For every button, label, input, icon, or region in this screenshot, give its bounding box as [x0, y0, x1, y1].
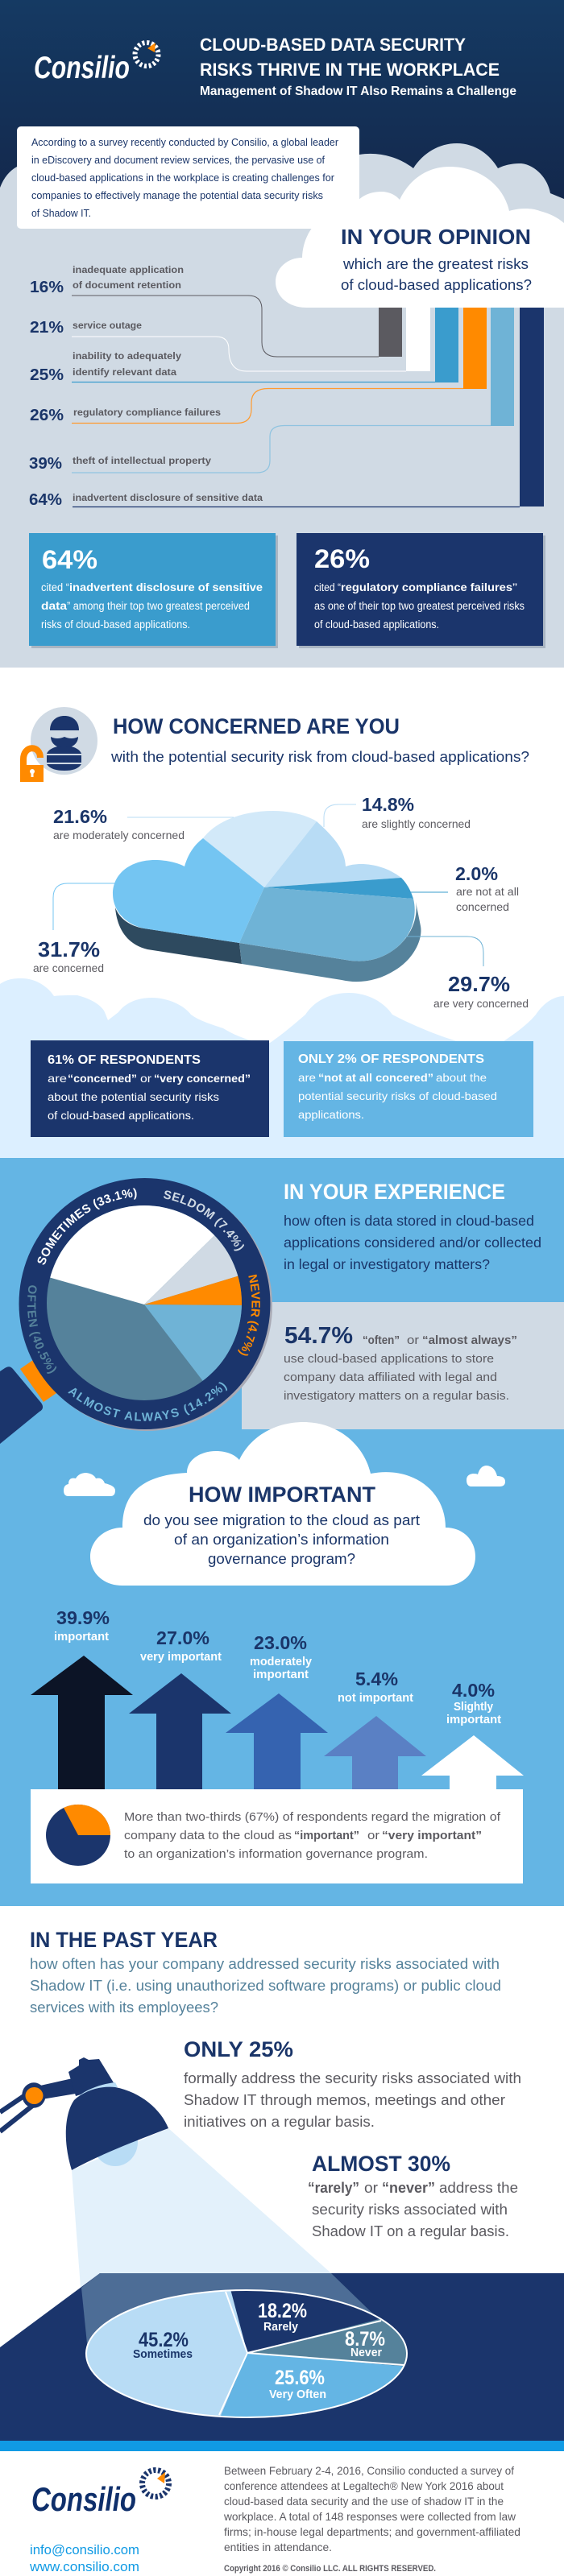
heading: in the past year: IN THE PAST YEAR [30, 1928, 218, 1952]
callout: more than two-thirds: company data to the cloud as [124, 1829, 292, 1842]
bar: relevant data 25% [435, 298, 458, 382]
panel: 54.7% grey band [242, 1302, 564, 1429]
risk row: 21%: service outage [73, 320, 142, 331]
intro text box: According to a survey recently conducted by Consilio, a global leader [31, 136, 339, 148]
white cloud: how important: do you see migration to the cloud as part [143, 1512, 420, 1528]
arrow: 23.0% moderately important: moderately [250, 1655, 313, 1668]
callout: 61% of respondents: 61% OF RESPONDENTS [48, 1053, 201, 1067]
callout: 61% of respondents [31, 1040, 269, 1137]
callout: only 2% of respondents: about the [436, 1071, 487, 1084]
arrow: 23.0% moderately important: important [253, 1668, 309, 1681]
label: 31.7% concerned [33, 883, 115, 974]
callout: 26% regulatory compliance: ” [512, 581, 517, 593]
icon: thief with open lock [20, 707, 97, 782]
label: 8.7% never: Never [350, 2346, 382, 2359]
magnifying glass pie chart: OFTEN (40.5%) [27, 1285, 56, 1374]
callout: more than two-thirds [31, 1789, 523, 1883]
callout: 64% inadvertent disclosure: inadvertent disclosure of sensitive [69, 581, 263, 593]
contact details [29, 2542, 139, 2574]
bar: intellectual property 39% [491, 298, 514, 426]
white cloud: how important [90, 1422, 475, 1586]
panel: 54.7% grey band: “often” [363, 1334, 400, 1347]
callout: 26% regulatory compliance: 26% [314, 544, 370, 573]
intro text box: companies to effectively manage the potential data security risks [31, 189, 323, 201]
text: almost 30%: “never” [382, 2180, 435, 2196]
text: almost 30%: or [364, 2180, 378, 2196]
risk row: 26%: 26% [30, 407, 64, 424]
contact details: info@consilio.com [30, 2542, 139, 2557]
magnifying glass pie chart: ALMOST ALWAYS (14.2%) [68, 1382, 227, 1421]
label: 25.6% very often: Very Often [269, 2388, 326, 2401]
label: 29.7% very concerned: are very concerned [433, 997, 529, 1010]
risk row: 64% [29, 491, 520, 509]
callout: 26% regulatory compliance: as one of their top two greatest perceived risks [314, 600, 525, 612]
bar: regulatory compliance 26% [463, 298, 487, 389]
callout: only 2% of respondents: ONLY 2% OF RESPONDENTS [298, 1052, 484, 1066]
callout: 64% inadvertent disclosure: risks of cloud-based applications. [41, 618, 190, 631]
survey methodology text: Between February 2-4, 2016, Consilio conducted a survey of [224, 2464, 514, 2477]
callout: 64% inadvertent disclosure: 64% [42, 545, 97, 574]
callout: 61% of respondents: about the potential security risks [48, 1090, 219, 1103]
heading: in your experience: how often is data stored in cloud-based [284, 1213, 534, 1229]
magnifying glass pie chart: NEVER (4.7%) [238, 1274, 260, 1356]
arrow: 4.0% slightly important: 4.0% [452, 1680, 495, 1701]
arrow: 5.4% not important: 5.4% [355, 1668, 398, 1689]
arrow: 39.9% important: important [54, 1630, 109, 1644]
white cloud: in your opinion: which are the greatest risks [342, 256, 529, 272]
title: Management of Shadow IT Also Remains a Challenge [200, 85, 516, 98]
panel: 54.7% grey band: use cloud-based applications to store [284, 1352, 494, 1366]
arrow: 23.0% moderately important: 23.0% [254, 1632, 307, 1653]
label: 21.6% moderately concerned: 21.6% [53, 806, 107, 827]
callout: more than two-thirds: “very important” [382, 1829, 482, 1842]
text: almost 30%: address the [439, 2180, 518, 2196]
magnifying glass pie chart [19, 1178, 272, 1431]
risk row: 25% [30, 350, 435, 384]
risk row: 64%: 64% [29, 491, 62, 509]
risk row: 16%: inadequate application [73, 264, 184, 275]
arrow: 39.9% important: 39.9% [56, 1607, 110, 1628]
callout: more than two-thirds: “important” [294, 1829, 359, 1842]
text: almost 30%: ALMOST 30% [312, 2152, 450, 2176]
title [200, 35, 516, 98]
footer logo: Consilio [31, 2480, 136, 2518]
risk row: 39% [29, 425, 491, 473]
label: 2.0% not at all concerned [410, 863, 519, 913]
heading: in the past year: services with its employees? [30, 1999, 218, 2016]
intro text box: in eDiscovery and document review services, the pervasive use of [31, 154, 325, 166]
label: 21.6% moderately concerned [53, 806, 234, 841]
text: almost 30%: Shadow IT on a regular basis. [312, 2223, 509, 2239]
callout: more than two-thirds: to an organization’s information governance program. [124, 1847, 428, 1861]
label: 45.2% sometimes: 45.2% [139, 2329, 189, 2351]
icon: small cloud right [467, 1466, 505, 1486]
callout: only 2% of respondents: potential security risks of cloud-based [298, 1090, 497, 1102]
heading: in your experience: in legal or investigatory matters? [284, 1256, 490, 1272]
risk row: 25%: identify relevant data [73, 366, 176, 378]
callout: 64% inadvertent disclosure [29, 533, 278, 648]
callout: 61% of respondents: “very concerned” [154, 1072, 251, 1085]
heading: in the past year [30, 1928, 501, 2016]
elliptical pie chart [85, 2289, 408, 2418]
white cloud: in your opinion: IN YOUR OPINION [341, 225, 531, 249]
callout: only 2% of respondents: “not at all concered” [318, 1071, 433, 1084]
label: 29.7% very concerned [403, 937, 529, 1010]
intro text box [17, 126, 359, 229]
label: 18.2% rarely [258, 2300, 307, 2334]
risk row: 25%: 25% [30, 366, 64, 384]
survey methodology text: workplace. A total of 148 responses were collected from law [223, 2510, 516, 2523]
label: 31.7% concerned: 31.7% [38, 937, 100, 961]
header logo: Consilio [34, 51, 130, 85]
heading: how concerned are you: HOW CONCERNED ARE YOU [113, 714, 400, 738]
survey methodology text [223, 2464, 520, 2553]
panel: 54.7% grey band: investigatory matters on a regular basis. [284, 1389, 509, 1403]
callout: 26% regulatory compliance [297, 533, 545, 648]
risk row: 26%: regulatory compliance failures [73, 407, 221, 418]
bar: service outage 21% [406, 298, 430, 371]
icon: desk lamp [0, 2057, 168, 2170]
label: 8.7% never [345, 2328, 385, 2359]
panel: risks background cloud [0, 143, 564, 668]
white cloud: in your opinion [276, 167, 564, 308]
callout: 61% of respondents: of cloud-based applications. [48, 1109, 194, 1122]
white cloud: how important: of an organization’s information [174, 1532, 389, 1548]
light beam [72, 2128, 331, 2288]
risk row: 64%: inadvertent disclosure of sensitive data [73, 492, 263, 503]
header background [0, 0, 564, 209]
panel: navy desk [0, 2273, 564, 2441]
arrow: 27.0% very important: 27.0% [156, 1627, 209, 1648]
cloud pie chart [113, 811, 421, 982]
text: only 25%: ONLY 25% [184, 2037, 293, 2061]
label: 14.8% slightly concerned: 14.8% [362, 794, 414, 815]
label: 31.7% concerned: are concerned [33, 961, 104, 974]
callout: more than two-thirds: More than two-thirds (67%) of respondents regard the migration of [124, 1810, 501, 1824]
label: 2.0% not at all concerned: are not at all [456, 885, 519, 898]
heading: in the past year: how often has your company addressed security risks associated with [30, 1956, 500, 1972]
label: 45.2% sometimes [133, 2329, 193, 2361]
label: 2.0% not at all concerned: 2.0% [455, 863, 498, 884]
heading: how concerned are you [110, 714, 529, 765]
label: 25.6% very often: 25.6% [275, 2367, 325, 2389]
callout: 64% inadvertent disclosure: data [41, 599, 67, 612]
callout: 61% of respondents: are [48, 1072, 67, 1085]
panel: 54.7% grey band: or [407, 1334, 419, 1347]
magnifying glass pie chart: SOMETIMES (33.1%) [37, 1189, 137, 1265]
risk row: 25%: inability to adequately [73, 350, 181, 362]
label: 14.8% slightly concerned [324, 794, 471, 830]
risk row: 26% [30, 388, 463, 424]
footer accent band [0, 2441, 564, 2451]
label: 21.6% moderately concerned: are moderately concerned [53, 829, 185, 841]
light beam on desk [81, 2273, 387, 2375]
bar: document retention 16% [379, 298, 402, 357]
text: almost 30%: security risks associated with [312, 2202, 508, 2218]
bar: inadvertent disclosure 64% [520, 298, 544, 507]
copyright: Copyright 2016 © Consilio LLC. ALL RIGHTS RESERVED. [224, 2564, 436, 2574]
callout: 64% inadvertent disclosure: cited “ [41, 581, 69, 593]
callout: 26% regulatory compliance: cited “ [314, 581, 341, 593]
heading: in your experience: IN YOUR EXPERIENCE [284, 1180, 505, 1204]
text: only 25%: Shadow IT through memos, meetings and other [184, 2092, 505, 2108]
text: only 25%: initiatives on a regular basis. [184, 2114, 375, 2130]
label: 45.2% sometimes: Sometimes [133, 2347, 193, 2361]
risk row: 21%: 21% [30, 319, 64, 337]
risk row: 39%: theft of intellectual property [73, 455, 211, 466]
callout: 26% regulatory compliance: of cloud-based applications. [314, 618, 439, 631]
intro text box: cloud-based applications in the workplace is creating challenges for [31, 172, 335, 184]
callout: 61% of respondents: “concerned” [68, 1072, 137, 1085]
contact details: www.consilio.com [29, 2559, 139, 2574]
callout: 61% of respondents: or [140, 1072, 151, 1085]
icon: small cloud left [64, 1473, 115, 1496]
label: 2.0% not at all concerned: concerned [456, 900, 509, 913]
heading: how concerned are you: with the potential security risk from cloud-based applications? [110, 749, 529, 765]
magnifying glass handle [0, 1360, 56, 1444]
arrow: 27.0% very important: very important [140, 1650, 222, 1664]
risk row: 16%: 16% [30, 279, 64, 296]
white cloud: in your opinion: of cloud-based applications? [341, 277, 532, 293]
title: RISKS THRIVE IN THE WORKPLACE [200, 60, 500, 80]
arrow: 4.0% slightly important: important [446, 1713, 501, 1726]
intro text box: of Shadow IT. [31, 207, 91, 219]
panel: 54.7% grey band: company data affiliated with legal and [284, 1371, 497, 1384]
white cloud: how important: HOW IMPORTANT [189, 1482, 376, 1507]
label: 14.8% slightly concerned: are slightly concerned [362, 817, 471, 830]
arrow: 39.9% important [31, 1607, 133, 1789]
title: CLOUD-BASED DATA SECURITY [200, 35, 466, 55]
text: only 25% [184, 2037, 521, 2130]
callout: 64% inadvertent disclosure: ” among their top two greatest perceived [67, 600, 250, 612]
arrow: 23.0% moderately important [226, 1632, 328, 1789]
arrow: 27.0% very important [129, 1627, 231, 1789]
arrow: 5.4% not important [324, 1668, 426, 1789]
label: 29.7% very concerned: 29.7% [448, 972, 510, 996]
callout: 26% regulatory compliance: regulatory compliance failures [341, 581, 512, 593]
text: only 25%: formally address the security risks associated with [184, 2070, 521, 2086]
text: almost 30%: “rarely” [308, 2180, 359, 2196]
heading: in the past year: Shadow IT (i.e. using unauthorized software programs) or public cloud [30, 1978, 501, 1994]
callout: only 2% of respondents [284, 1041, 533, 1137]
white cloud: how important: governance program? [208, 1551, 355, 1567]
risk row: 21% [30, 319, 406, 371]
panel: 54.7% grey band: “almost always” [422, 1334, 517, 1347]
label: 18.2% rarely: Rarely [263, 2320, 299, 2334]
survey methodology text: cloud-based data security and the use of shadow IT in the [224, 2495, 504, 2508]
text: almost 30% [308, 2152, 518, 2239]
heading: in your experience: applications considered and/or collected [284, 1234, 541, 1251]
panel: 54.7% grey band: 54.7% [284, 1323, 353, 1349]
label: 25.6% very often [269, 2367, 326, 2401]
survey methodology text: entities in attendance. [224, 2541, 332, 2553]
callout: only 2% of respondents: are [298, 1071, 316, 1084]
risk row: 16% [30, 264, 379, 357]
panel: blue experience and importance section [0, 1158, 564, 1906]
risk row: 16%: of document retention [73, 279, 181, 291]
survey methodology text: conference attendees at Legaltech® New York 2016 about [224, 2479, 504, 2492]
magnifying glass pie chart: SELDOM (7.4%) [164, 1190, 244, 1251]
arrow: 5.4% not important: not important [338, 1691, 413, 1705]
risk row: 39%: 39% [29, 455, 62, 473]
callout: only 2% of respondents: applications. [298, 1108, 364, 1121]
survey methodology text: firms; in-house legal departments; and government-affiliated [224, 2525, 520, 2538]
arrow: 4.0% slightly important [421, 1680, 524, 1789]
background light clouds [0, 978, 564, 1160]
heading: in your experience [284, 1180, 541, 1272]
arrow: 4.0% slightly important: Slightly [454, 1700, 494, 1714]
label: 18.2% rarely: 18.2% [258, 2300, 307, 2322]
label: 8.7% never: 8.7% [345, 2328, 385, 2351]
callout: more than two-thirds: or [367, 1829, 379, 1842]
